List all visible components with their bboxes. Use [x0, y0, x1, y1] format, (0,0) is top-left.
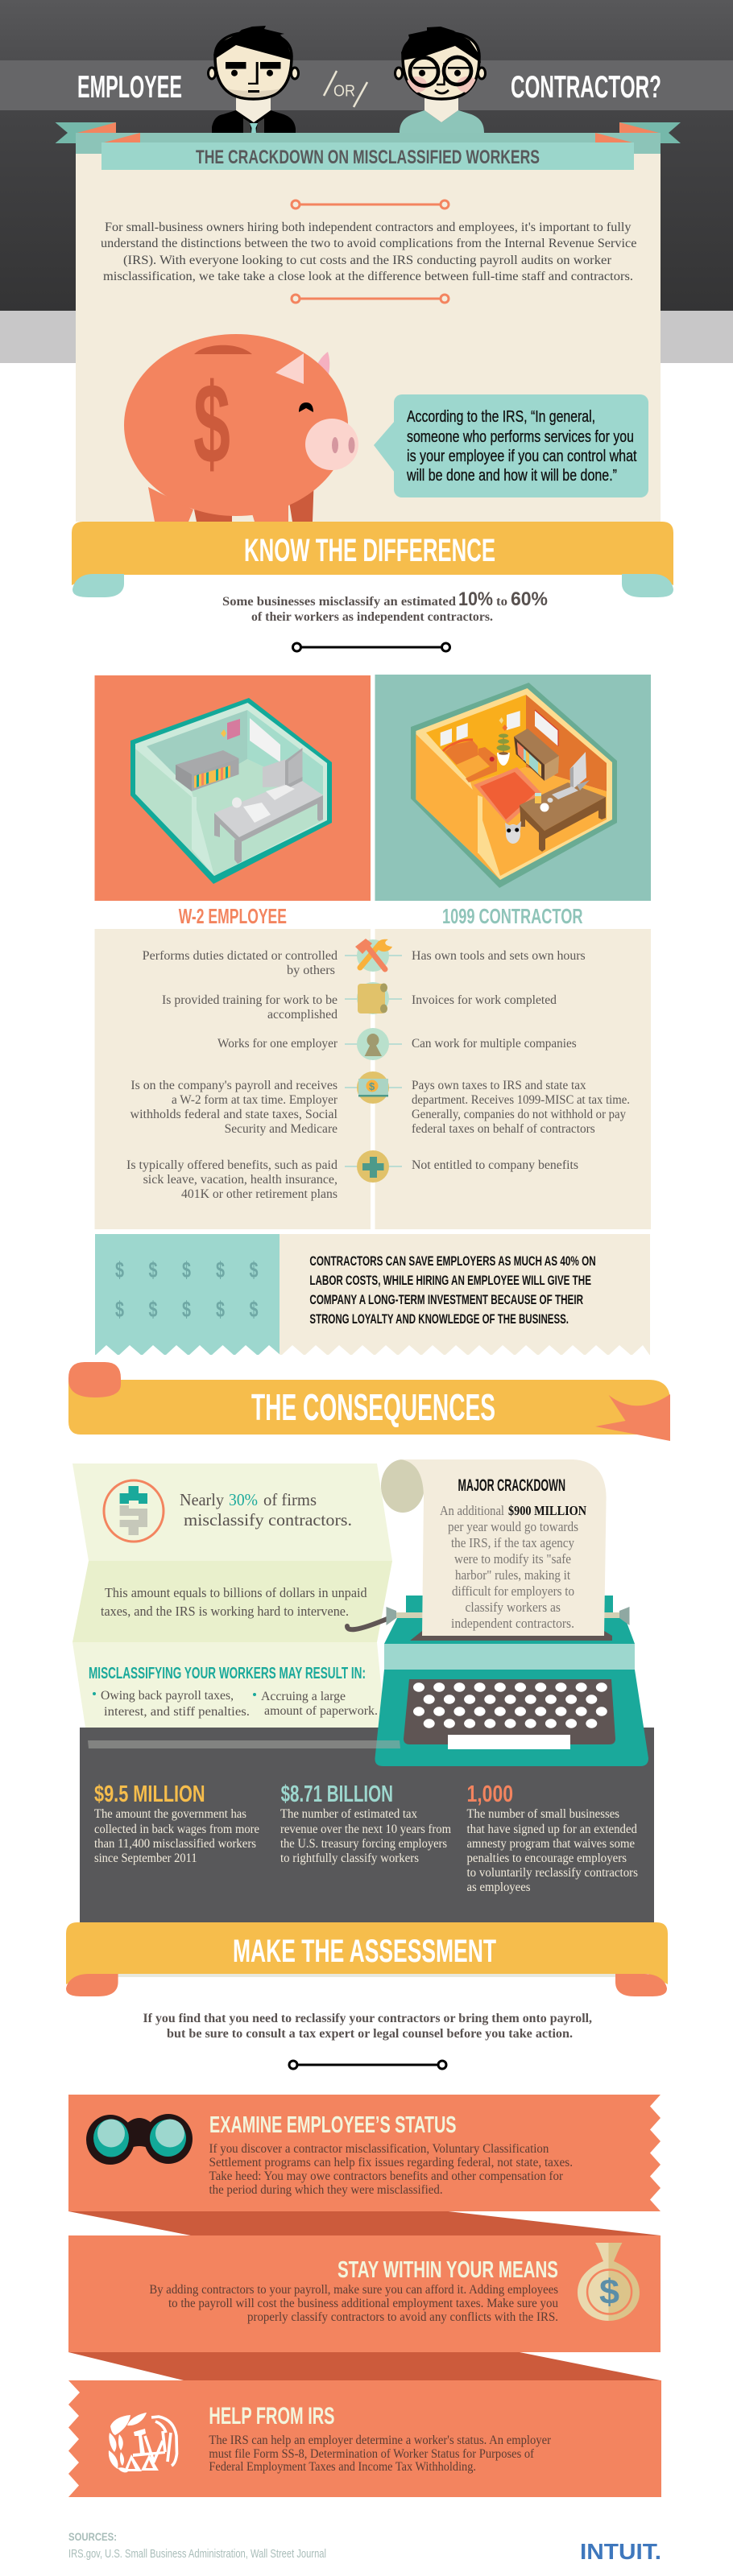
list: results: Accruing a large [261, 1690, 346, 1703]
illustration: contractor character [395, 27, 485, 143]
heading: W-2 employee: W-2 EMPLOYEE [179, 904, 287, 928]
panel: stay within your means: properly classify contractors to avoid any conflicts with the IRS. [247, 2310, 558, 2324]
stat: 1,000: penalties to encourage employers [467, 1852, 627, 1865]
panel: folded paper [72, 1463, 392, 1728]
panel: major crackdown scroll: independent contractors. [451, 1616, 574, 1631]
text: employee traits: Performs duties dictated or controlled [143, 949, 338, 963]
title: or separator [324, 71, 367, 107]
text: misclassify estimate: 10% [458, 588, 493, 610]
text: employee traits: Is provided training for work to be [162, 993, 338, 1007]
banner: make the assessment: MAKE THE ASSESSMENT [233, 1934, 496, 1969]
panel: major crackdown scroll: An additional [440, 1503, 504, 1518]
icon: person [357, 1028, 389, 1060]
icon: money [357, 1071, 389, 1104]
illustration: employee character [208, 26, 298, 143]
stat: nearly 30 percent: of firms [263, 1490, 317, 1509]
panel: stay within your means: STAY WITHIN YOUR MEANS [338, 2257, 558, 2283]
panel: examine employee status: Take heed: You may owe contractors benefits and other compensation for [209, 2169, 564, 2183]
dollar pattern: $ [250, 1257, 259, 1282]
stat: 9.5 million: collected in back wages from more [94, 1823, 259, 1836]
banner: the consequences: THE CONSEQUENCES [251, 1386, 495, 1428]
text: reclassify advice: If you find that you need to reclassify your contractors or bring them onto payroll, [143, 2012, 592, 2025]
callout: IRS quote: is your employee if you can control what [407, 448, 637, 465]
divider bottom [292, 295, 449, 303]
typewriter keys [413, 1682, 607, 1749]
text: employee traits: Security and Medicare [225, 1122, 338, 1136]
ribbon: crackdown heading [101, 142, 634, 170]
text: contractor traits: Generally, companies do not withhold or pay [412, 1108, 626, 1121]
icon: binoculars [86, 2114, 193, 2165]
stat: nearly 30 percent [180, 1490, 352, 1530]
list: results: amount of paperwork. [264, 1704, 378, 1718]
savings text: LABOR COSTS, WHILE HIRING AN EMPLOYEE WILL GIVE THE [309, 1273, 591, 1288]
panel: examine employee status: Settlement programs can help fix issues regarding federal, not state, taxes. [209, 2156, 573, 2169]
icon: money bag: $ [599, 2273, 619, 2312]
text: misclassify estimate: 60% [511, 588, 548, 610]
panel: help from IRS [68, 2380, 661, 2497]
icon: money bag [578, 2243, 640, 2321]
text: reclassify advice: but be sure to consult a tax expert or legal counsel before you take action. [167, 2027, 573, 2041]
text: contractor traits: Has own tools and sets own hours [412, 949, 586, 963]
dollar pattern: $ [148, 1257, 158, 1282]
stat: 8.71 billion: the U.S. treasury forcing employers [280, 1837, 447, 1851]
text: contractor traits: Not entitled to company benefits [412, 1158, 578, 1172]
text: contractor traits: Invoices for work completed [412, 993, 557, 1007]
dollar pattern: $ [148, 1297, 158, 1322]
panel: major crackdown scroll: were to modify its "safe [454, 1551, 571, 1567]
savings text: CONTRACTORS CAN SAVE EMPLOYERS AS MUCH AS 40% ON [309, 1253, 596, 1269]
panel: dark stats background [80, 1728, 654, 1922]
stat: nearly 30 percent: Nearly [180, 1490, 224, 1509]
heading: may result in: MISCLASSIFYING YOUR WORKERS MAY RESULT IN: [89, 1665, 366, 1682]
savings text [309, 1253, 596, 1327]
text: employee traits: withholds federal and state taxes, Social [130, 1108, 338, 1121]
banner: make the assessment [66, 1922, 668, 1996]
banner: the consequences [68, 1362, 670, 1441]
text: employee traits: 401K or other retirement plans [181, 1187, 338, 1201]
text: contractor traits: Pays own taxes to IRS and state tax [412, 1079, 586, 1092]
panel: intro [55, 122, 681, 522]
title: or separator: OR [333, 82, 355, 100]
list: results: Owing back payroll taxes, [101, 1689, 234, 1703]
callout: IRS quote [374, 394, 648, 497]
text: contractor traits: department. Receives 1099-MISC at tax time. [412, 1093, 630, 1107]
dollar pattern: $ [115, 1257, 124, 1282]
panel: major crackdown scroll: $900 MILLION [508, 1503, 587, 1518]
stat: 1,000: as employees [467, 1880, 530, 1894]
icon: IRS eagle wing [145, 2417, 177, 2466]
icon: scroll [357, 982, 389, 1014]
panel: help from IRS: must file Form SS-8, Determination of Worker Status for Purposes of [209, 2447, 535, 2461]
savings text: STRONG LOYALTY AND KNOWLEDGE OF THE BUSINESS. [309, 1311, 569, 1327]
divider top [292, 200, 449, 208]
stat: 9.5 million: than 11,400 misclassified workers [94, 1837, 256, 1851]
stat: 9.5 million: $9.5 MILLION [94, 1781, 205, 1807]
stat: 1,000: The number of small businesses [467, 1807, 619, 1821]
panel: major crackdown scroll: MAJOR CRACKDOWN [458, 1476, 565, 1495]
heading: 1099 contractor: 1099 CONTRACTOR [442, 904, 583, 928]
dollar pattern [115, 1257, 259, 1322]
panel: major crackdown scroll: per year would go towards [448, 1519, 578, 1534]
stat: 1,000: 1,000 [467, 1781, 513, 1807]
text: employee traits: by others [287, 964, 335, 977]
stat: 8.71 billion: $8.71 BILLION [281, 1781, 393, 1807]
stat: 9.5 million: since September 2011 [94, 1852, 197, 1865]
callout: IRS quote: According to the IRS, “In general, [407, 408, 595, 426]
callout: IRS quote: will be done and how it will be done.” [406, 467, 617, 485]
text: employee traits: Works for one employer [217, 1037, 338, 1051]
footer: sources: SOURCES: [68, 2530, 117, 2543]
intro paragraph: understand the distinctions between the two to avoid complications from the Internal Revenue Service [101, 237, 636, 250]
banner: know the difference [72, 522, 673, 597]
text: reclassify advice [143, 2012, 592, 2041]
text: misclassify estimate: of their workers as independent contractors. [251, 610, 493, 624]
panel: contractor office illustration [375, 675, 651, 901]
text: unpaid taxes [101, 1585, 367, 1619]
intro paragraph: (IRS). With everyone looking to cut costs and the IRS conducting payroll audits on worker [123, 254, 612, 267]
text: misclassify estimate [222, 588, 548, 624]
stat: 9.5 million [94, 1781, 259, 1865]
text: unpaid taxes: taxes, and the IRS is working hard to intervene. [101, 1604, 349, 1619]
panel: major crackdown scroll: harbor" rules, making it [455, 1567, 570, 1583]
footer: sources: IRS.gov, U.S. Small Business Administration, Wall Street Journal [68, 2547, 326, 2561]
footer: sources [68, 2530, 326, 2561]
savings text: COMPANY A LONG-TERM INVESTMENT BECAUSE OF THEIR [309, 1292, 583, 1307]
banner: know the difference: KNOW THE DIFFERENCE [244, 533, 495, 568]
text: contractor traits: federal taxes on behalf of contractors [412, 1122, 595, 1136]
icon: IRS eagle logo [109, 2413, 165, 2472]
panel: savings callout [95, 1234, 650, 1356]
stat: nearly 30 percent: 30% [229, 1490, 258, 1509]
panel: help from IRS: Federal Employment Taxes and Income Tax Withholding. [209, 2460, 476, 2474]
stat: 1,000: that have signed up for an extended [467, 1823, 637, 1836]
panel: comparison backgrounds [95, 929, 651, 1229]
text: employee traits: Is on the company's payroll and receives [130, 1079, 338, 1092]
panel: help from IRS: The IRS can help an employer determine a worker's status. An employer [209, 2434, 552, 2447]
panel: examine employee status [68, 2095, 661, 2211]
text: unpaid taxes: This amount equals to billions of dollars in unpaid [105, 1585, 367, 1600]
ribbon: crackdown heading: THE CRACKDOWN ON MISCLASSIFIED WORKERS [196, 147, 540, 168]
header background [0, 0, 733, 363]
dollar pattern: $ [182, 1297, 191, 1322]
stat: 1,000: to voluntarily reclassify contractors [467, 1866, 638, 1880]
stat: 9.5 million: The amount the government has [94, 1807, 246, 1821]
icon: dollar in circle [104, 1480, 164, 1542]
text: employee traits [126, 949, 338, 1201]
intro paragraph: misclassification, we take take a close look at the difference between full-time staff and contractors. [103, 270, 633, 283]
text: misclassify estimate: Some businesses misclassify an estimated [222, 595, 456, 609]
text: employee traits: a W-2 form at tax time. Employer [172, 1093, 338, 1107]
stat: 8.71 billion: to rightfully classify workers [280, 1852, 419, 1865]
panel: stay within your means [68, 2235, 661, 2352]
illustration: typewriter [347, 1596, 648, 1766]
intro paragraph [101, 221, 636, 283]
logo: Intuit: INTUIT. [580, 2539, 661, 2564]
icon: tools [355, 939, 392, 972]
dollar pattern: $ [182, 1257, 191, 1282]
icon: money: $ [369, 1080, 375, 1092]
panel: major crackdown scroll [381, 1459, 607, 1636]
illustration: piggy bank: $ [193, 360, 230, 488]
dollar pattern: $ [216, 1297, 225, 1322]
dollar pattern: $ [115, 1297, 124, 1322]
divider black [293, 643, 449, 651]
list: results: interest, and stiff penalties. [104, 1705, 250, 1719]
panel: stay within your means: By adding contractors to your payroll, make sure you can afford it. Adding employees [149, 2283, 558, 2297]
stat: nearly 30 percent: misclassify contractors. [184, 1510, 352, 1530]
callout: IRS quote: someone who performs services for you [407, 428, 634, 446]
panel: employee office illustration [95, 675, 371, 901]
stat: 1,000 [467, 1781, 638, 1894]
connector lines [345, 956, 402, 1166]
panel: examine employee status: the period during which they were misclassified. [209, 2183, 443, 2197]
text: employee traits: Is typically offered benefits, such as paid [126, 1158, 338, 1172]
stat: 8.71 billion: revenue over the next 10 years from [280, 1823, 452, 1836]
title: employee: EMPLOYEE [77, 70, 182, 105]
stat: 8.71 billion: The number of estimated tax [280, 1807, 417, 1821]
panel: major crackdown scroll: difficult for employers to [452, 1583, 574, 1599]
dollar pattern: $ [250, 1297, 259, 1322]
text: employee traits: accomplished [267, 1008, 338, 1022]
text: misclassify estimate: to [496, 595, 507, 609]
ribbon fold shadows [68, 2211, 661, 2380]
dollar pattern: $ [216, 1257, 225, 1282]
panel: major crackdown scroll: the IRS, if the tax agency [451, 1535, 574, 1550]
ribbon back with tails [55, 122, 681, 154]
panel: stay within your means: to the payroll will cost the business additional employment taxes. Make sure you [168, 2297, 558, 2310]
icon: medical cross [357, 1150, 389, 1183]
panel: examine employee status: If you discover a contractor misclassification, Voluntary Classification [209, 2142, 549, 2156]
panel: examine employee status: EXAMINE EMPLOYEE’S STATUS [209, 2112, 456, 2138]
stat: 1,000: amnesty program that waives some [467, 1837, 635, 1851]
panel: help from IRS: HELP FROM IRS [209, 2403, 335, 2429]
text: contractor traits [412, 949, 630, 1172]
intro paragraph: For small-business owners hiring both independent contractors and employees, it's important to fully [105, 221, 632, 234]
list: results [93, 1689, 378, 1719]
shadow bar [88, 1740, 400, 1748]
panel: major crackdown scroll: classify workers as [466, 1600, 561, 1615]
text: employee traits: sick leave, vacation, health insurance, [143, 1173, 338, 1187]
text: contractor traits: Can work for multiple companies [412, 1037, 577, 1051]
illustration: piggy bank [124, 334, 358, 522]
stat: 8.71 billion [280, 1781, 452, 1865]
divider black [289, 2061, 446, 2069]
